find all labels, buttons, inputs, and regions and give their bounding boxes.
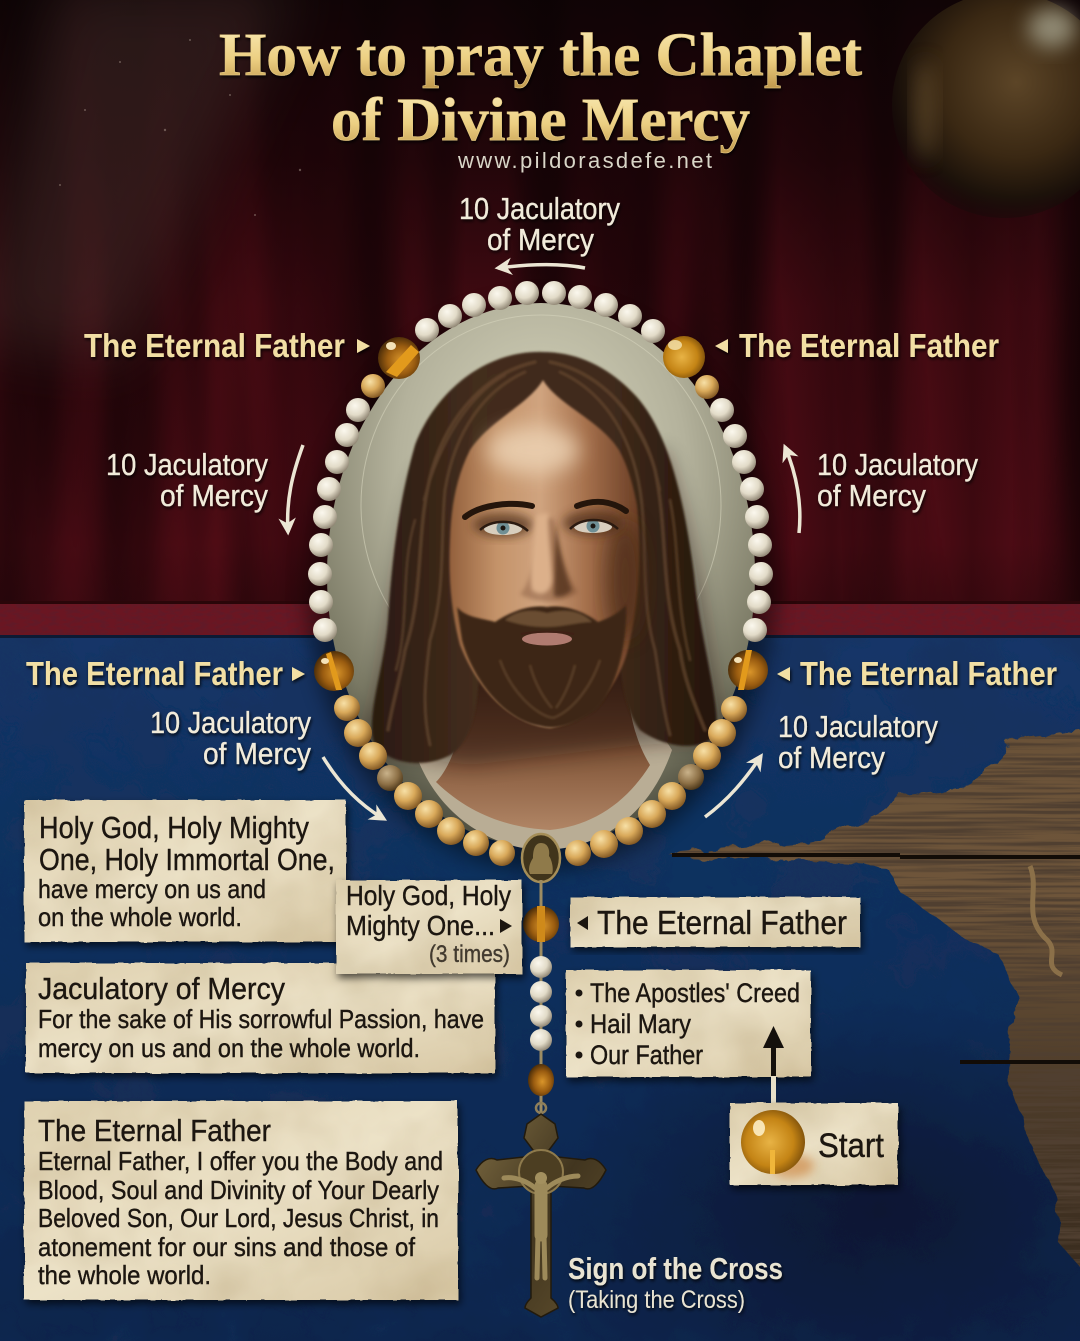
arrow: top, pointing left [498, 265, 585, 268]
oval shadow [306, 300, 776, 870]
arrow: right side, pointing up [785, 447, 800, 533]
beard [457, 605, 626, 728]
amber beads on the loop [314, 336, 768, 691]
neck and chest [436, 660, 650, 830]
medal [522, 834, 560, 882]
label: The Eternal Father, upper left: The Eternal Father [84, 327, 345, 364]
label: 10 Jaculatory, right red: of Mercy [817, 478, 926, 513]
label: 10 Jaculatory, left blue: of Mercy [203, 736, 311, 771]
label: 10 Jaculatory, right red [817, 447, 978, 513]
arrow: lower left, pointing to beads [323, 757, 384, 819]
pearl beads, left side [308, 398, 370, 642]
note: Jaculatory of Mercy: For the sake of His sorrowful Passion, have [38, 1004, 484, 1034]
caption: Sign of the Cross [568, 1251, 783, 1314]
note: The Eternal Father prayer [24, 1101, 458, 1300]
rosary stem beads [523, 880, 559, 1120]
face [449, 380, 639, 728]
mouth [521, 632, 574, 646]
eyebrows [465, 502, 626, 517]
nose [520, 513, 578, 601]
note: The Eternal Father, stem: The Eternal Father [597, 904, 847, 941]
note: opening prayers list: Our Father [590, 1040, 703, 1070]
forehead highlight [487, 426, 579, 474]
eye sockets [473, 511, 623, 537]
note: Holy God prayer: on the whole world. [38, 902, 242, 932]
note: The Eternal Father prayer: Eternal Father, I offer you the Body and [38, 1146, 443, 1176]
note: The Eternal Father prayer: the whole world. [38, 1260, 211, 1290]
cheek shadow right [607, 520, 643, 640]
title: How to pray the Chaplet [219, 22, 863, 89]
label: 10 Jaculatory, left red: of Mercy [160, 478, 268, 513]
label: 10 Jaculatory, right blue: 10 Jaculatory [778, 709, 938, 744]
note: Start with amber bead [730, 1103, 898, 1185]
label: 10 Jaculatory, left blue: 10 Jaculatory [150, 705, 311, 740]
left eye [480, 522, 528, 535]
robe [418, 700, 672, 850]
note: Holy God prayer: have mercy on us and [38, 874, 266, 904]
label: 10 Jaculatory, left blue [150, 705, 311, 771]
note: Jaculatory of Mercy: Jaculatory of Mercy [38, 971, 285, 1006]
note: Holy God three times: Mighty One... [346, 910, 495, 941]
pearl beads, right side [710, 398, 773, 642]
title: of Divine Mercy [331, 87, 750, 154]
note: The Eternal Father prayer: The Eternal Father [38, 1113, 271, 1148]
right eye [570, 520, 618, 533]
top label: 10 Jaculatory of Mercy [459, 191, 620, 257]
shadow behind hair [360, 450, 725, 765]
note: The Eternal Father, stem [570, 897, 860, 947]
top label: 10 Jaculatory of Mercy: of Mercy [487, 222, 594, 257]
pearl beads, top arc [415, 281, 665, 343]
note: Holy God three times: Holy God, Holy [346, 880, 511, 911]
arrow: from start up to prayers [763, 1026, 784, 1106]
portrait of Jesus [306, 300, 776, 870]
note: The Eternal Father prayer: atonement for our sins and those of [38, 1232, 416, 1262]
note: opening prayers list: The Apostles' Creed [590, 978, 800, 1008]
note: Holy God three times [336, 880, 522, 974]
caption: Sign of the Cross: (Taking the Cross) [568, 1286, 745, 1314]
label: 10 Jaculatory, right blue: of Mercy [778, 740, 885, 775]
website url: www.pildorasdefe.net [457, 148, 712, 173]
label: The Eternal Father, upper right: The Eternal Father [739, 327, 999, 364]
note: opening prayers list [566, 970, 811, 1077]
label: 10 Jaculatory, left red: 10 Jaculatory [106, 447, 268, 482]
note: opening prayers list: Hail Mary [590, 1009, 691, 1039]
note: The Eternal Father prayer: Beloved Son, Our Lord, Jesus Christ, in [38, 1203, 439, 1233]
rosary loop of beads [308, 281, 773, 882]
background: red curtain [0, 0, 1080, 640]
icon: amber start bead [741, 1110, 814, 1178]
crucifix [476, 1114, 606, 1317]
title [219, 22, 863, 154]
background: exposed wood planks [600, 715, 1080, 1315]
hair [372, 352, 717, 763]
brass sphere, top right [892, 0, 1080, 218]
note: Jaculatory of Mercy [26, 963, 495, 1073]
note: Holy God three times: (3 times) [429, 941, 510, 968]
caption: Sign of the Cross: Sign of the Cross [568, 1251, 783, 1286]
golden beads, lower right [565, 375, 747, 866]
label: The Eternal Father, middle left: The Eternal Father [26, 655, 283, 692]
decorative red band [0, 601, 1080, 638]
note: Start with amber bead: Start [818, 1127, 884, 1165]
note: Jaculatory of Mercy: mercy on us and on the whole world. [38, 1033, 420, 1063]
note: Holy God prayer: One, Holy Immortal One, [39, 842, 335, 877]
top label: 10 Jaculatory of Mercy: 10 Jaculatory [459, 191, 620, 226]
label: 10 Jaculatory, right red: 10 Jaculatory [817, 447, 978, 482]
arrow: left side, pointing down [288, 445, 303, 532]
halo oval [327, 303, 755, 847]
note: Holy God prayer [24, 800, 346, 942]
label: 10 Jaculatory, left red [106, 447, 268, 513]
halo ring [361, 315, 721, 695]
background: blue cloth [0, 620, 1080, 1341]
plank gaps [672, 855, 1080, 1062]
note: Holy God prayer: Holy God, Holy Mighty [39, 810, 309, 845]
arrow: lower right, pointing up [705, 756, 761, 817]
label: 10 Jaculatory, right blue [778, 709, 938, 775]
note: The Eternal Father prayer: Blood, Soul and Divinity of Your Dearly [38, 1175, 439, 1205]
golden beads, lower left [334, 374, 515, 866]
